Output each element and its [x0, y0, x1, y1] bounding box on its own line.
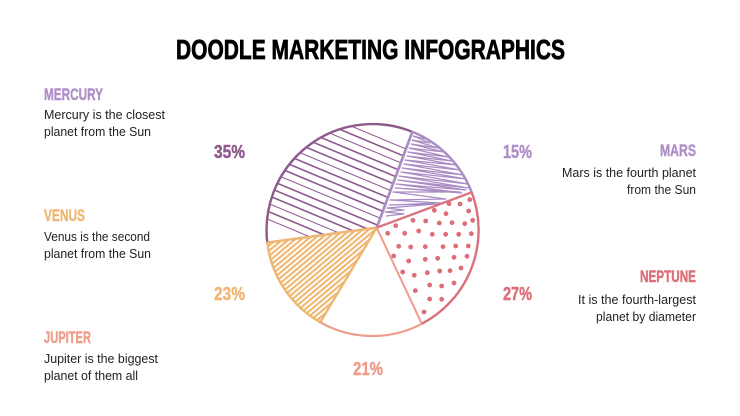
text block: Mercury: planet from the Sun	[44, 125, 151, 139]
slice: Mercury 35%	[265, 122, 413, 244]
value: Venus 23%: 23%	[214, 284, 245, 304]
pie chart	[265, 122, 480, 338]
slice: Jupiter 21%	[320, 322, 422, 336]
text block: Venus	[44, 207, 151, 261]
value: Mercury 35%: 35%	[214, 142, 245, 162]
slice: Neptune 27%	[377, 192, 479, 324]
text block: Jupiter: Jupiter is the biggest	[44, 352, 159, 366]
text block: Neptune: NEPTUNE	[640, 268, 696, 286]
value: Neptune 27%: 27%	[503, 284, 532, 304]
text block: Jupiter: planet of them all	[44, 369, 138, 383]
text block: Jupiter: JUPITER	[44, 329, 91, 347]
slice: Mars 15%	[377, 132, 472, 228]
text block: Venus: VENUS	[44, 207, 85, 225]
text block: Mars: from the Sun	[627, 183, 696, 197]
text block: Neptune	[578, 268, 697, 324]
text block: Mercury: Mercury is the closest	[44, 108, 166, 122]
slice: Venus 23%	[267, 228, 377, 322]
value: Mars 15%: 15%	[503, 142, 532, 162]
text block: Mars	[562, 142, 697, 197]
text block: Neptune: It is the fourth-largest	[578, 293, 697, 307]
text block: Venus: planet from the Sun	[44, 247, 151, 261]
value: Jupiter 21%: 21%	[353, 359, 383, 379]
text block: Venus: Venus is the second	[44, 230, 150, 244]
text block: Neptune: planet by diameter	[596, 310, 696, 324]
title: DOODLE MARKETING INFOGRAPHICS	[176, 34, 565, 65]
text block: Jupiter	[44, 329, 159, 383]
text block: Mars: Mars is the fourth planet	[562, 166, 697, 180]
text block: Mars: MARS	[660, 142, 696, 160]
text block: Mercury	[44, 86, 166, 139]
text block: Mercury: MERCURY	[44, 86, 103, 104]
